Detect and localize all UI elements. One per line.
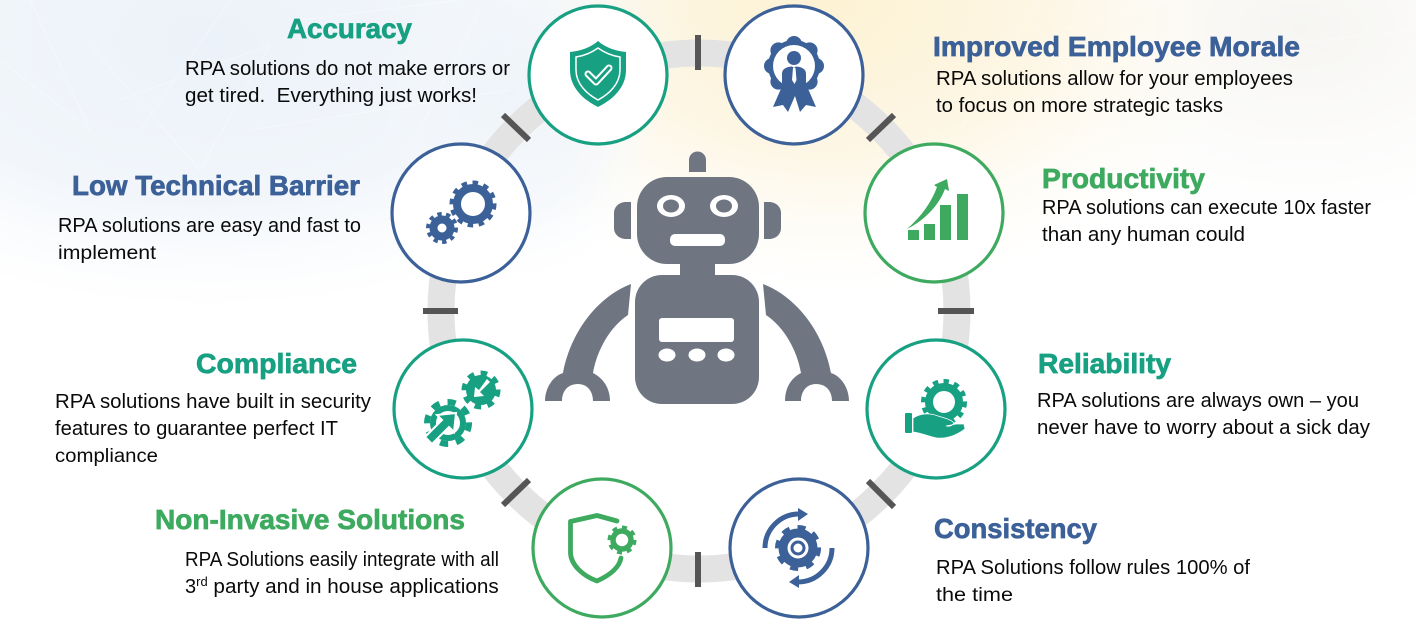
text: non-invasive description: 3 bbox=[185, 576, 196, 598]
icon: gears with arrows bbox=[394, 340, 532, 478]
text: accuracy description: get tired. Everything just works! bbox=[185, 85, 477, 107]
panel: productivity bbox=[865, 144, 1371, 282]
text: productivity description: than any human could bbox=[1042, 224, 1245, 246]
panel: low technical barrier bbox=[58, 144, 530, 282]
text: low technical barrier description bbox=[58, 215, 361, 264]
text: low technical barrier description: implement bbox=[58, 243, 157, 264]
text: non-invasive description: party and in house applications bbox=[208, 576, 499, 598]
text: non-invasive description: rd bbox=[196, 574, 208, 589]
text: morale description bbox=[936, 68, 1293, 117]
text: morale description: to focus on more strategic tasks bbox=[936, 95, 1223, 117]
icon: gears bbox=[392, 144, 530, 282]
heading: low technical barrier: Low Technical Barrier bbox=[72, 170, 360, 201]
panel: accuracy bbox=[185, 6, 667, 144]
text: consistency description: the time bbox=[936, 585, 1013, 606]
icon: award ribbon with person bbox=[725, 6, 863, 144]
text: reliability description bbox=[1037, 390, 1370, 439]
icon: rising bars bbox=[865, 144, 1003, 282]
heading: non-invasive solutions: Non-Invasive Solutions bbox=[155, 504, 465, 535]
text: morale description: RPA solutions allow for your employees bbox=[936, 68, 1293, 90]
panel: compliance bbox=[55, 340, 532, 478]
text: consistency description: RPA Solutions follow rules 100% of bbox=[936, 557, 1250, 579]
panel: reliability bbox=[867, 340, 1370, 478]
heading: reliability: Reliability bbox=[1038, 348, 1172, 379]
heading: accuracy: Accuracy bbox=[287, 13, 413, 44]
text: reliability description: never have to worry about a sick day bbox=[1037, 417, 1370, 439]
icon: hand holding gear bbox=[867, 340, 1005, 478]
heading: consistency: Consistency bbox=[934, 513, 1098, 544]
heading: compliance: Compliance bbox=[196, 348, 357, 379]
central robot bbox=[545, 152, 849, 404]
text: non-invasive description bbox=[185, 549, 499, 598]
text: accuracy description: RPA solutions do not make errors or bbox=[185, 58, 510, 80]
heading: productivity: Productivity bbox=[1042, 163, 1206, 194]
text: compliance description bbox=[55, 391, 371, 467]
text: productivity description bbox=[1042, 197, 1371, 246]
text: low technical barrier description: RPA solutions are easy and fast to bbox=[58, 215, 361, 237]
panel: improved employee morale bbox=[725, 6, 1300, 144]
progress ring with ticks bbox=[423, 35, 974, 587]
text: compliance description: features to guarantee perfect IT bbox=[55, 418, 338, 440]
text: reliability description: RPA solutions are always own – you bbox=[1037, 390, 1359, 412]
text: consistency description bbox=[936, 557, 1250, 606]
panel: consistency bbox=[730, 479, 1250, 617]
text: compliance description: RPA solutions have built in security bbox=[55, 391, 371, 413]
text: accuracy description bbox=[185, 58, 510, 107]
text: productivity description: RPA solutions can execute 10x faster bbox=[1042, 197, 1371, 219]
text: non-invasive description: RPA Solutions easily integrate with all bbox=[185, 549, 499, 571]
icon: shield with check bbox=[529, 6, 667, 144]
icon: gear with cycle arrows bbox=[730, 479, 868, 617]
icon: shield with gear bbox=[533, 479, 671, 617]
heading: morale: Improved Employee Morale bbox=[933, 31, 1300, 62]
panel: non-invasive solutions bbox=[155, 479, 671, 617]
text: compliance description: compliance bbox=[55, 446, 158, 467]
